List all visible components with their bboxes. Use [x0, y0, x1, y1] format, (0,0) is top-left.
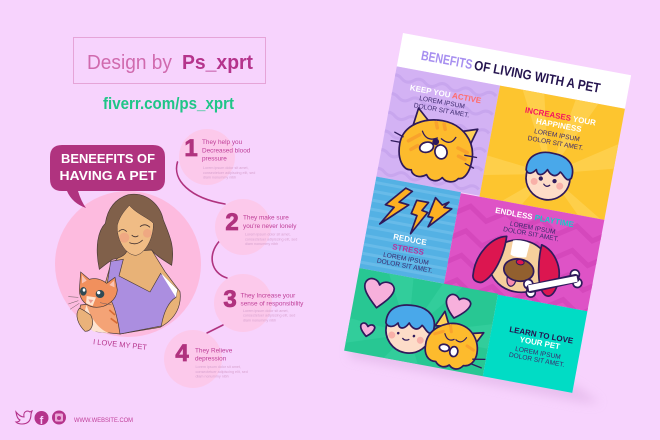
item 2: They make sure — [243, 214, 289, 222]
item 2: diam nonummy nibh — [245, 242, 278, 246]
speech bubble heading — [50, 145, 165, 208]
panel: reduce stress: STRESS — [392, 242, 425, 257]
icon: heart small — [359, 322, 375, 338]
icon: boy and cat — [380, 301, 492, 374]
poster header: BENEFITS — [420, 48, 474, 72]
panel: learn to love (teal): LEARN TO LOVE — [509, 325, 575, 346]
panel: reduce stress — [359, 177, 461, 284]
panel: endless playtime — [444, 193, 604, 312]
item 1: pressure — [202, 156, 227, 162]
purple top — [107, 259, 177, 334]
item 1 — [179, 129, 255, 185]
item 4 — [164, 330, 248, 388]
icon: dog — [471, 232, 588, 306]
title box: Design by Ps_xprt — [74, 38, 266, 84]
panel: endless playtime: LOREM IPSUM — [509, 221, 556, 236]
item 2 — [215, 199, 297, 255]
icon: lightning bolts — [379, 185, 454, 240]
panel: keep you active: LOREM IPSUM — [419, 95, 465, 110]
panel: keep you active — [371, 66, 500, 196]
speech bubble heading: HAVING A PET — [60, 168, 157, 183]
title box: Design by Ps_xprt: Ps_xprt — [182, 52, 253, 74]
item 3: sense of responsibility — [240, 300, 304, 308]
portrait circle with woman and cat — [55, 191, 201, 337]
icon: boy — [521, 149, 575, 204]
icon: heart large — [361, 277, 395, 310]
item 3: Lorem ipsum dolor sit amet, — [243, 309, 288, 313]
caption: I love my pet: I LOVE MY PET — [93, 337, 148, 352]
panel: reduce stress: DOLOR SIT AMET. — [376, 258, 433, 275]
item 4: Lorem ipsum dolor sit amet, — [196, 365, 241, 369]
item 3 — [214, 274, 304, 332]
panel: learn to love (teal): DOLOR SIT AMET. — [508, 352, 565, 369]
item 3: They Increase your — [240, 292, 296, 300]
social icons and website — [16, 410, 133, 427]
item 2: Lorem ipsum dolor sit amet, — [245, 232, 290, 236]
hand — [77, 308, 93, 331]
item 2: consectetuer adipiscing elit, sed — [245, 237, 297, 241]
panel: increases your happiness: LOREM IPSUM — [534, 128, 580, 143]
item 4: They Relieve — [195, 348, 233, 354]
panel: increases your happiness: DOLOR SIT AMET. — [527, 135, 584, 152]
link: fiverr url: fiverr.com/ps_xprt — [103, 95, 234, 113]
connector curves — [177, 162, 227, 333]
social icons and website: WWW.WEBSITE.COM — [74, 417, 133, 424]
poster header — [397, 33, 631, 109]
panel: learn to love (teal): YOUR PET — [519, 335, 561, 351]
face — [117, 205, 153, 255]
poster — [339, 32, 641, 395]
poster header: OF LIVING WITH A PET — [473, 58, 602, 96]
cat body — [80, 302, 120, 334]
icon: cat — [385, 104, 483, 187]
hair — [97, 194, 173, 269]
item 1: consectetuer adipiscing elit, sed — [203, 171, 255, 175]
panel: learn to love (green) — [344, 268, 498, 376]
panel: learn to love (teal): LOREM IPSUM — [515, 346, 561, 361]
icon: heart medium — [444, 293, 472, 321]
title box: Design by Ps_xprt: Design by — [87, 51, 173, 74]
panel: learn to love (teal) — [483, 295, 587, 393]
item 1: They help you — [202, 139, 243, 146]
panel: reduce stress: REDUCE — [393, 232, 428, 247]
panel: endless playtime: DOLOR SIT AMET. — [503, 226, 559, 243]
panel: keep you active: KEEP YOU ACTIVE — [409, 83, 483, 105]
item 1: diam nonummy nibh — [203, 176, 236, 180]
item 1: Lorem ipsum dolor sit amet, — [203, 166, 248, 170]
skin torso — [103, 250, 180, 334]
panel: increases your happiness — [479, 86, 625, 220]
item 3: 3 — [223, 286, 237, 313]
panel: keep you active: DOLOR SIT AMET. — [413, 102, 470, 119]
item 1: 1 — [184, 135, 198, 162]
speech bubble heading: BENEEFITS OF — [61, 151, 155, 166]
item 1: Decreased blood — [202, 148, 251, 154]
panel: endless playtime: ENDLESS PLAYTIME — [495, 206, 575, 229]
panel: increases your happiness: HAPPINESS — [535, 117, 583, 134]
social icons and website: f — [40, 415, 44, 427]
item 3: diam nonummy nibh — [243, 318, 276, 322]
item 4: depression — [195, 356, 227, 362]
item 2: you're never lonely — [243, 223, 297, 230]
panel: increases your happiness: INCREASES YOUR — [524, 106, 597, 128]
cat head — [79, 272, 117, 307]
panel: reduce stress: LOREM IPSUM — [382, 252, 429, 267]
item 4: 4 — [175, 340, 189, 367]
item 3: consectetuer adipiscing elit, sed — [243, 314, 295, 318]
poster shadow — [350, 345, 600, 403]
item 2: 2 — [225, 209, 239, 236]
item 4: diam nonummy nibh — [196, 374, 229, 378]
item 4: consectetuer adipiscing elit, sed — [196, 370, 248, 374]
